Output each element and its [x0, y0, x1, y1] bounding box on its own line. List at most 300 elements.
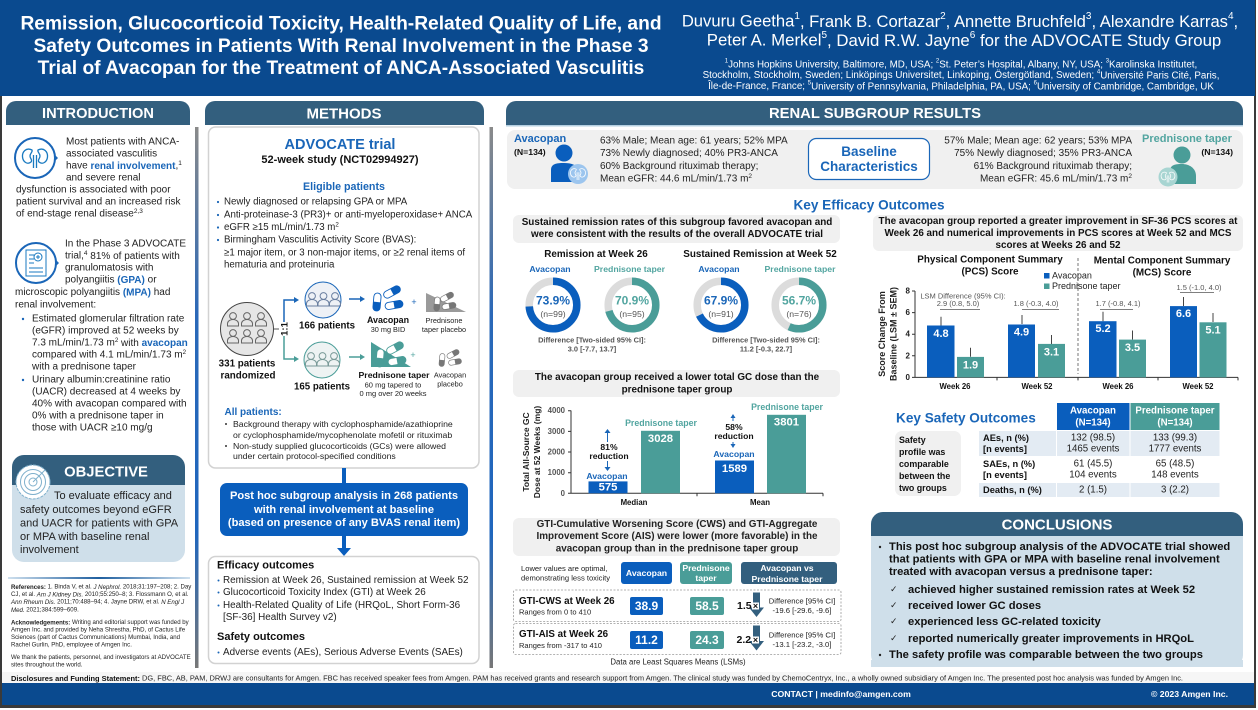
text: renal involvement paragraph: have renal involvement,	[66, 160, 178, 172]
subhead: gti: avacopan group than in the prednisone taper group	[556, 544, 798, 554]
text: conclusions: received lower GC doses	[908, 600, 1041, 612]
heading: mcs: Mental Component Summary	[1094, 256, 1231, 266]
heading: efficacy outcomes: Efficacy outcomes	[217, 560, 314, 572]
arrow: post hoc to outcomes	[337, 536, 351, 556]
box: post hoc subgroup analysis: Post hoc subgroup analysis in 268 patients	[230, 490, 458, 502]
row: gti-cws: 58.5	[695, 599, 719, 613]
heading: conclusions: CONCLUSIONS	[1002, 516, 1112, 534]
row: gti-cws: GTI-CWS at Week 26	[519, 596, 615, 607]
footer	[2, 683, 1254, 705]
label: 1:1: 1:1	[280, 321, 290, 336]
text: renal involvement paragraph: 2,3	[134, 208, 143, 214]
authors: , David R.W. Jayne	[827, 30, 970, 50]
label: prednisone taper placebo	[422, 316, 466, 334]
references and acknowledgements: Amgen Inc. and provided by Neha Shrestha, PhD, of Cactus Life	[11, 626, 186, 634]
label: avacopan placebo	[434, 370, 466, 388]
heading: mcs: (MCS) Score	[1133, 268, 1192, 278]
diagram: randomization flow	[219, 282, 466, 398]
note: safety comparable: comparable	[899, 459, 949, 469]
bars: mcs week 26: 3.5	[1125, 342, 1140, 354]
text: phase 3 advocate paragraph: polyangiitis (GPA) or	[65, 274, 157, 286]
callout: 58% reduction	[714, 414, 754, 448]
text: renal involvement paragraph: and severe renal	[66, 172, 140, 184]
label: 165 patients: 165 patients	[294, 382, 350, 392]
text: avacopan characteristics: 73% Newly diagnosed; 40% PR3-ANCA	[600, 148, 778, 159]
row: gti-ais: 24.3	[695, 633, 719, 647]
text: objective: and UACR for patients with GPA	[20, 518, 179, 530]
row: gti-cws	[514, 590, 841, 622]
column header: prednisone taper: taper	[695, 573, 717, 583]
bar chart: sf-36 scores: 6	[906, 308, 911, 317]
text: renal involvement paragraph: Most patients with ANCA-	[66, 136, 179, 148]
references and acknowledgements: Ann Rheum Dis. 2011;70:488–94; 4. Jayne DRW, et al. N Engl J	[10, 598, 185, 606]
text: renal involvement paragraph: associated vasculitis	[66, 148, 157, 160]
bullets: egfr and uacr: compared with 4.1 mL/min/1.73 m	[32, 350, 183, 360]
table: safety: 1777 events	[1149, 444, 1202, 454]
label: prednisone arm: Prednisone taper	[1142, 133, 1233, 145]
text: conclusions: that patients with GPA or MPA with baseline renal involvement	[889, 554, 1220, 566]
text: objective: To evaluate efficacy and	[54, 490, 172, 502]
list: eligibility: hematuria and proteinuria	[224, 260, 335, 270]
text: phase 3 advocate paragraph	[15, 238, 186, 310]
bullets: egfr and uacr: Estimated glomerular filtration rate	[32, 314, 185, 324]
table: safety: AEs, n (%)	[983, 433, 1029, 443]
callout: 58% reduction: reduction	[714, 431, 754, 441]
note: lsm: Data are Least Squares Means (LSMs)	[610, 658, 746, 666]
text: phase 3 advocate paragraph: granulomatosis with	[65, 262, 153, 274]
bar chart: gc dose: 4000	[548, 406, 566, 415]
text: renal involvement paragraph: patient survival and an increased risk	[16, 196, 182, 208]
heading: advocate trial: ADVOCATE trial	[285, 137, 395, 153]
column header: comparison: Prednisone taper	[752, 574, 823, 584]
label: prednisone taper placebo: Prednisone	[426, 316, 462, 325]
label: avacopan arm: (N=134)	[514, 147, 546, 157]
section: hrqol	[873, 215, 1243, 391]
bar chart: sf-36 scores: Score Change From	[877, 291, 887, 377]
references and acknowledgements: Acknowledgements: Writing and editorial support was funded by	[11, 619, 190, 626]
box: post hoc subgroup analysis: (based on presence of any BVAS renal item)	[228, 517, 460, 529]
arrow: card to post hoc	[342, 468, 346, 484]
footer: CONTACT | medinfo@amgen.com	[771, 689, 911, 699]
affiliations: Université Paris Cité, Paris,	[1100, 70, 1219, 81]
row: gti-ais: -13.1 [-23.2, -3.0]	[773, 640, 831, 649]
references and acknowledgements	[10, 584, 192, 668]
bar chart: sf-36 scores: 0	[906, 373, 911, 382]
table: safety: Deaths, n (%)	[983, 485, 1042, 495]
label: sustained remission week 52: Sustained Remission at Week 52	[683, 249, 837, 260]
legend: Avacopan	[1052, 270, 1092, 280]
bullets: egfr and uacr: 2	[183, 348, 187, 356]
column header: avacopan: Avacopan	[626, 568, 667, 578]
note: lower values: Lower values are optimal,	[521, 564, 608, 573]
donut: avacopan week 26: (n=99)	[540, 309, 566, 319]
text: conclusions: experienced less GC-related toxicity	[908, 616, 1102, 628]
bar chart: gc dose	[521, 402, 824, 507]
references and acknowledgements: sites throughout the world.	[11, 662, 83, 668]
bars: pcs week 26: 4.8	[933, 328, 949, 340]
heading: safety outcomes: Safety outcomes	[217, 631, 305, 643]
icon: all patients	[220, 302, 274, 356]
icon: prednisone taper	[371, 341, 411, 367]
bar: median prednisone: 3028	[648, 433, 673, 445]
table: safety: (N=134)	[1157, 418, 1193, 428]
authors: 4	[1228, 10, 1234, 22]
text: all patients: Background therapy with cyclophosphamide/azathioprine	[233, 419, 453, 429]
icon: prednisone patient	[1158, 146, 1196, 186]
subhead: hrqol: scores at Weeks 26 and 52	[996, 240, 1121, 251]
affiliations	[703, 58, 1219, 92]
bar chart: sf-36 scores: Week 26	[939, 382, 971, 391]
list: eligibility: Anti-proteinase-3 (PR3)+ or anti-myeloperoxidase+ ANCA	[224, 210, 473, 220]
icon: avacopan placebo	[439, 349, 462, 367]
donut: prednisone week 52: Prednisone taper	[765, 264, 836, 274]
icon: avacopan capsules	[373, 285, 403, 311]
bar: mean avacopan: 1589	[722, 463, 747, 475]
text: phase 3 advocate paragraph: In the Phase 3 ADVOCATE	[65, 238, 186, 250]
note: safety comparable: between the	[899, 471, 950, 481]
row: gti-ais: Difference [95% CI]	[769, 630, 835, 640]
label: prednisone taper placebo: taper placebo	[422, 325, 466, 334]
affiliations: Johns Hopkins University, Baltimore, MD, USA;	[728, 59, 936, 70]
row: gti-ais: 2.2	[736, 634, 751, 646]
box: post hoc subgroup analysis	[220, 483, 468, 536]
label: avacopan dose	[367, 315, 409, 334]
callout: 81% reduction: 81%	[600, 442, 618, 452]
list: eligibility: Newly diagnosed or relapsing GPA or MPA	[224, 196, 408, 208]
bar: median prednisone: Prednisone taper	[625, 418, 698, 428]
panel: conclusions	[871, 512, 1243, 667]
label: 331 randomized: 331 patients	[219, 358, 276, 370]
authors: , Alexandre Karras	[1091, 12, 1228, 30]
references and acknowledgements: Med. 2021;384:599–609.	[11, 606, 79, 614]
icon: prednisone taper placebo	[426, 291, 466, 312]
table: safety: [n events]	[983, 444, 1027, 454]
list: eligibility: 2	[335, 221, 339, 228]
title: Remission, Glucocorticoid Toxicity, Health-Related Quality of Life, and	[20, 14, 662, 34]
donut: prednisone week 52: (n=76)	[786, 309, 812, 319]
text: objective: safety outcomes beyond eGFR	[20, 504, 172, 516]
references and acknowledgements: CJ, et al. Am J Kidney Dis. 2010;55:250–8; 3. Flossmann O, et al.	[11, 591, 189, 598]
card: study design	[208, 127, 479, 468]
row: gti-cws: 38.9	[635, 599, 659, 613]
bar: mean avacopan: Avacopan	[713, 449, 755, 459]
column header: prednisone taper	[680, 562, 732, 584]
text: conclusions: ✓	[890, 634, 898, 644]
authors: 5	[821, 30, 827, 40]
callout: 81% reduction: reduction	[589, 451, 629, 461]
icon: kidney	[15, 138, 58, 178]
bar: mean prednisone: 3801	[774, 416, 799, 428]
card: outcomes	[208, 556, 479, 664]
section: key safety outcomes	[895, 403, 1220, 497]
box: baseline characteristics: Characteristics	[820, 159, 918, 174]
label: avacopan dose: Avacopan	[367, 315, 409, 325]
label: avacopan placebo: Avacopan	[434, 370, 466, 380]
section: remission	[513, 215, 840, 354]
bullets: egfr and uacr: Urinary albumin:creatinine ratio	[32, 374, 171, 386]
label: prednisone arm: (N=134)	[1201, 147, 1233, 157]
text: prednisone characteristics: 57% Male; Mean age: 62 years; 53% MPA	[944, 136, 1132, 146]
heading: methods	[205, 101, 484, 125]
table: safety	[979, 403, 1220, 497]
text: all patients: All patients:	[224, 407, 282, 418]
heading: mcs	[1094, 256, 1231, 278]
row: gti-cws: ×	[753, 601, 758, 611]
affiliations: 2	[936, 58, 940, 64]
table: safety: Avacopan	[1070, 406, 1116, 416]
donut: prednisone week 26: (n=95)	[619, 309, 645, 319]
text: renal involvement paragraph	[16, 136, 182, 220]
lsm differences: 1.5 (-1.0, 4.0)	[1176, 283, 1222, 292]
column header: avacopan	[621, 562, 672, 584]
list: efficacy outcomes: Health-Related Quality of Life (HRQoL, Short Form-36	[223, 600, 461, 611]
box: baseline characteristics: Baseline	[841, 144, 897, 159]
text: study length: 52-week study (NCT02994927)	[261, 154, 419, 166]
text: avacopan characteristics: 2	[748, 172, 752, 180]
icon: document	[16, 243, 59, 283]
authors	[682, 10, 1238, 50]
text: phase 3 advocate paragraph: trial,	[65, 250, 84, 262]
text: difference week 52: 11.2 [-0.3, 22.7]	[740, 344, 793, 354]
label: prednisone dose: 60 mg tapered to	[365, 380, 421, 390]
table: safety: 133 (99.3)	[1153, 432, 1197, 444]
text: phase 3 advocate paragraph: microscopic polyangiitis (MPA) had	[15, 287, 170, 298]
label: remission week 26: Remission at Week 26	[544, 249, 648, 260]
authors: 1	[794, 10, 800, 22]
text: phase 3 advocate paragraph: renal involvement:	[15, 300, 96, 310]
row: gti-cws: -19.6 [-29.6, -9.6]	[773, 606, 831, 615]
text: phase 3 advocate paragraph: 4	[84, 250, 88, 256]
note: safety comparable: two groups	[899, 483, 947, 493]
subhead: gti: Improvement Score (AIS) were lower (more favorable) in the	[537, 531, 818, 542]
panel: methods	[205, 101, 493, 668]
bar: mean prednisone: Prednisone taper	[751, 402, 824, 412]
bars: pcs week 52: 3.1	[1044, 346, 1059, 358]
text: conclusions: achieved higher sustained remission rates at Week 52	[908, 584, 1195, 596]
icon: target	[16, 465, 50, 499]
references and acknowledgements: Rachel Gurlin, PhD, employee of Amgen Inc.	[11, 642, 132, 648]
bars: mcs week 52	[1170, 306, 1226, 377]
column header: comparison	[741, 562, 837, 584]
note: safety comparable: Safety	[899, 435, 926, 445]
bar: mean avacopan	[713, 449, 755, 493]
list: eligibility: ≥1 major item, or 3 non-major items, or ≥2 renal items of	[224, 248, 465, 258]
text: all patients: under certain protocol-specified conditions	[233, 451, 396, 461]
references and acknowledgements: We thank the patients, personnel, and investigators at ADVOCATE	[11, 654, 191, 661]
bar chart: gc dose: Dose at 52 Weeks (mg)	[532, 406, 542, 498]
authors: Duvuru Geetha	[682, 12, 794, 30]
subhead: remission	[513, 215, 840, 243]
donut: prednisone week 52	[765, 264, 836, 329]
text: objective	[20, 490, 179, 556]
text: phase 3 advocate paragraph: 81% of patients with	[88, 250, 180, 262]
donut: avacopan week 52: (n=91)	[708, 309, 734, 319]
label: 166 patients: 166 patients	[299, 320, 355, 332]
authors: 2	[940, 10, 946, 22]
donut: prednisone week 26: 70.9%	[615, 294, 649, 308]
affiliations: University of Pennsylvania, Philadelphia, PA, USA;	[811, 81, 1034, 92]
list: safety outcomes: Adverse events (AEs), Serious Adverse Events (SAEs)	[223, 647, 463, 658]
heading: pcs: Physical Component Summary	[917, 254, 1063, 266]
text: difference week 52: Difference [Two-sided 95% CI]:	[712, 336, 820, 344]
callout: 81% reduction	[589, 429, 629, 471]
bars: mcs week 52: 5.1	[1205, 324, 1221, 336]
bullets: egfr and uacr: avacopan	[142, 338, 188, 348]
band: baseline characteristics	[507, 130, 1243, 189]
callout: 58% reduction: 58%	[725, 422, 743, 432]
table: safety: 132 (98.5)	[1071, 432, 1115, 444]
legend	[1044, 270, 1121, 291]
row: gti-ais: GTI-AIS at Week 26	[519, 629, 609, 640]
text: renal involvement paragraph: dysfunction is associated with poor	[16, 184, 171, 196]
affiliations: 3	[1106, 58, 1110, 64]
bar chart: gc dose: Mean	[750, 498, 770, 507]
text: avacopan characteristics: 60% Background rituximab therapy;	[600, 161, 758, 172]
subhead: hrqol: The avacopan group reported a greater improvement in SF-36 PCS scores at	[879, 216, 1238, 227]
subhead: gti: GTI-Cumulative Worsening Score (CWS) and GTI-Aggregate	[537, 519, 818, 530]
bullets: egfr and uacr: 0% with a prednisone taper in	[32, 410, 164, 422]
bars: mcs week 26: 5.2	[1095, 323, 1111, 335]
donut: prednisone week 26: Prednisone taper	[594, 264, 666, 274]
heading: methods: METHODS	[306, 106, 382, 122]
label: avacopan arm: Avacopan	[514, 133, 566, 145]
bullets: egfr and uacr: 7.3 mL/min/1.73 m	[32, 338, 115, 348]
references and acknowledgements: References: 1. Binda V, et al. J Nephrol. 2018;31:197–208; 2. Day	[11, 584, 192, 590]
subhead: hrqol: Week 26 and numerical improvements in PCS scores at Week 52 and MCS	[884, 228, 1232, 239]
title	[20, 14, 662, 79]
affiliations: 4	[1097, 70, 1101, 76]
affiliations: Île-de-France, France;	[708, 81, 805, 92]
subhead: gc dose	[513, 370, 840, 397]
bar: median avacopan	[586, 471, 628, 494]
affiliations: University of Cambridge, Cambridge, UK	[1037, 81, 1214, 92]
text: conclusions: ✓	[890, 601, 898, 611]
table: safety: 148 events	[1151, 470, 1199, 480]
diagram: randomization flow: +	[411, 297, 417, 307]
panel: introduction	[6, 101, 198, 668]
authors: , Annette Bruchfeld	[946, 12, 1086, 30]
text: avacopan characteristics: 63% Male; Mean age: 61 years; 52% MPA	[600, 136, 788, 146]
section: gti	[513, 518, 841, 666]
box: post hoc subgroup analysis: with renal involvement at baseline	[253, 504, 434, 516]
bars: pcs week 52: 4.9	[1014, 326, 1029, 338]
heading: key efficacy outcomes: Key Efficacy Outcomes	[793, 198, 945, 212]
bar: mean prednisone	[751, 402, 824, 493]
bar chart: sf-36 scores: Week 26	[1102, 382, 1134, 391]
donut: prednisone week 26	[594, 264, 666, 329]
bar chart: gc dose: 2000	[548, 448, 566, 456]
text: renal involvement paragraph: of end-stage renal disease	[16, 208, 134, 220]
label: prednisone dose: 0 mg over 20 weeks	[359, 389, 427, 398]
heading: results	[506, 101, 1243, 125]
icon: avacopan patients	[305, 282, 341, 318]
bullets: egfr and uacr: (UACR) decreased at 4 weeks by	[32, 386, 180, 398]
text: prednisone characteristics: Mean eGFR: 45.6 mL/min/1.73 m	[980, 174, 1128, 184]
bar chart: sf-36 scores: 2	[906, 351, 911, 360]
bullets: egfr and uacr: 40% with avacopan compared with	[32, 398, 187, 410]
heading: pcs: (PCS) Score	[961, 266, 1019, 278]
note: safety comparable	[895, 431, 961, 496]
bar: median avacopan: 575	[599, 482, 617, 494]
diagram: randomization flow: +	[410, 350, 416, 360]
bullets: egfr and uacr: those with UACR ≥10 mg/g	[32, 422, 153, 434]
references and acknowledgements: Sciences (part of Cactus Communications) Mumbai, India, and	[11, 634, 180, 641]
bar chart: gc dose: 1000	[548, 468, 566, 477]
row: gti-ais: 11.2	[635, 633, 658, 647]
table: safety: 65 (48.5)	[1156, 458, 1194, 470]
lsm differences: LSM Difference (95% CI):	[920, 292, 1006, 300]
list: efficacy outcomes: Remission at Week 26, Sustained remission at Week 52	[223, 575, 469, 586]
bar chart: sf-36 scores: Baseline (LSM ± SEM)	[888, 287, 898, 381]
bullets: egfr and uacr: (eGFR) improved at 52 weeks by	[32, 326, 179, 336]
table: safety: (N=134)	[1075, 418, 1111, 428]
subhead: remission: Sustained remission rates of this subgroup favored avacopan and	[522, 217, 832, 228]
authors: , Frank B. Cortazar	[800, 12, 941, 30]
title: Trial of Avacopan for the Treatment of ANCA-Associated Vasculitis	[38, 58, 644, 79]
list: eligibility	[217, 196, 473, 270]
label: avacopan placebo: placebo	[437, 380, 463, 388]
text: avacopan characteristics: Mean eGFR: 44.6 mL/min/1.73 m	[600, 174, 748, 184]
subhead: gc dose: prednisone taper group	[622, 384, 732, 396]
heading: results: RENAL SUBGROUP RESULTS	[769, 106, 981, 122]
text: all patients: Non-study supplied glucocorticoids (GCs) were allowed	[233, 441, 446, 451]
bars: mcs week 26	[1089, 321, 1146, 377]
panel: renal subgroup results	[506, 101, 1243, 667]
list: efficacy outcomes: Glucocorticoid Toxicity Index (GTI) at Week 26	[223, 587, 426, 598]
bar chart: sf-36 scores: Week 52	[1182, 382, 1214, 391]
bullets: egfr and uacr	[22, 314, 188, 434]
donut: avacopan week 52: 67.9%	[704, 294, 738, 308]
label: avacopan arm	[514, 133, 566, 157]
row: gti-ais	[514, 624, 841, 654]
affiliations: 5	[808, 80, 812, 86]
table: safety: [n events]	[983, 470, 1027, 480]
donut: avacopan week 26	[529, 264, 577, 329]
table: safety: SAEs, n (%)	[983, 459, 1035, 469]
text: conclusions: The safety profile was comparable between the two groups	[889, 649, 1203, 661]
list: eligibility: Birmingham Vasculitis Activity Score (BVAS):	[224, 234, 416, 246]
bullets: egfr and uacr: 2	[115, 336, 119, 344]
donut: avacopan week 52	[697, 264, 745, 329]
label: 331 randomized: randomized	[221, 370, 276, 382]
text: conclusions	[879, 541, 1230, 661]
bars: mcs week 52: 6.6	[1176, 308, 1191, 320]
donut: avacopan week 26: Avacopan	[529, 264, 571, 274]
footer: © 2023 Amgen Inc.	[1151, 689, 1228, 699]
label: prednisone arm	[1142, 133, 1233, 157]
section: gc dose	[513, 370, 840, 507]
heading: introduction: INTRODUCTION	[42, 106, 154, 122]
table: safety: Prednisone taper	[1135, 406, 1215, 416]
affiliations: Stockholm, Stockholm, Sweden; Linköpings Universitet, Linkoping, Östergötland, Sweden;	[703, 70, 1094, 81]
text: all patients: or cyclophosphamide/mycophenolate mofetil or rituximab	[233, 430, 452, 440]
affiliations: 1	[725, 58, 729, 64]
donut: avacopan week 52: Avacopan	[698, 264, 740, 274]
heading: objective: OBJECTIVE	[64, 464, 148, 480]
authors: 6	[970, 30, 976, 40]
text: prednisone characteristics: 75% Newly diagnosed; 35% PR3-ANCA	[954, 148, 1132, 159]
heading: pcs	[917, 254, 1063, 278]
row: gti-ais: ×	[753, 635, 758, 645]
column header: comparison: Avacopan vs	[760, 563, 814, 573]
list: efficacy outcomes	[218, 575, 469, 623]
lsm differences: 1.7 (-0.8, 4.1)	[1095, 299, 1141, 308]
bar: median prednisone	[625, 418, 698, 493]
subhead: hrqol	[873, 215, 1243, 251]
label: 331 randomized	[219, 358, 276, 382]
table: safety: 3 (2.2)	[1161, 484, 1189, 496]
subhead: gc dose: The avacopan group received a lower total GC dose than the	[535, 372, 820, 383]
